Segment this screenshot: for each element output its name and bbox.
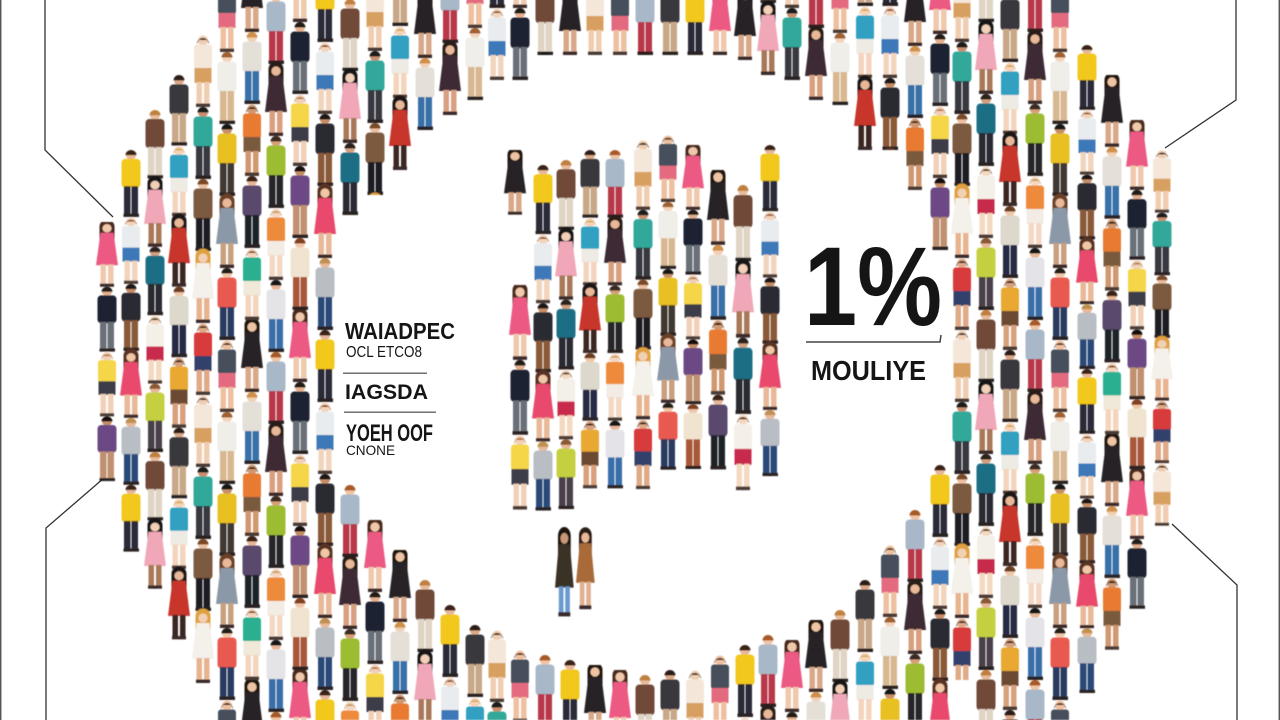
right statistic block bbox=[804, 224, 942, 386]
left label two: IAGSDA bbox=[345, 381, 428, 404]
left subheading: OCL ETCO8 bbox=[346, 344, 422, 361]
central block of people figures bbox=[503, 135, 782, 511]
left small caption: CNONE bbox=[346, 442, 395, 458]
left heading: WAIADPEC bbox=[345, 318, 455, 344]
big percentage: 1% bbox=[804, 224, 942, 349]
left label three: YOEH OOF bbox=[346, 420, 433, 447]
left text block bbox=[343, 318, 455, 458]
corner bracket: top left bbox=[45, 0, 113, 217]
top arc of ring bbox=[338, 0, 952, 250]
bottom arc of ring bbox=[338, 465, 952, 720]
statistic divider bbox=[806, 335, 941, 342]
statistic caption: MOULIYE bbox=[811, 355, 926, 386]
corner bracket: top right bbox=[1165, 0, 1236, 148]
left divider two bbox=[344, 412, 436, 413]
small pair of figures below centre bbox=[555, 527, 595, 616]
left side of ring bbox=[95, 0, 337, 720]
right side of ring bbox=[950, 0, 1174, 720]
corner bracket: bottom right bbox=[1172, 524, 1237, 720]
corner bracket: bottom left bbox=[46, 478, 104, 720]
left divider one bbox=[343, 372, 427, 374]
